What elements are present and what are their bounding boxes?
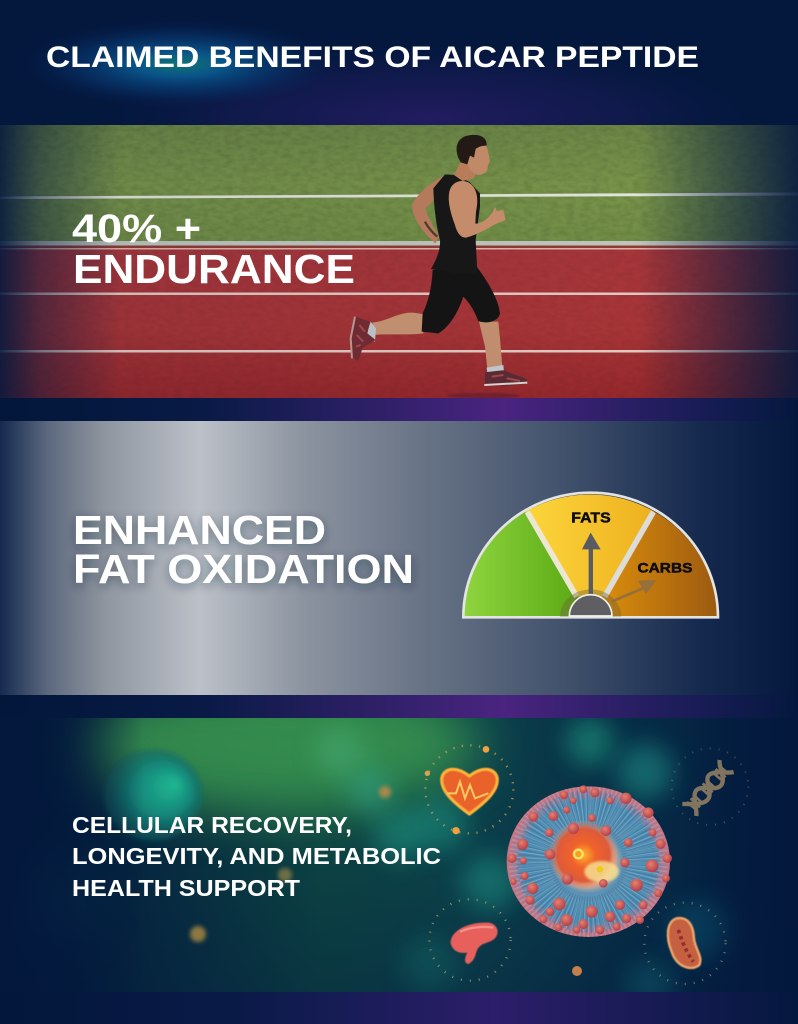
back leg bbox=[373, 313, 425, 335]
cell: fibres bbox=[513, 787, 663, 937]
divider band bbox=[0, 695, 798, 718]
text: cellular recovery bbox=[72, 812, 441, 901]
grass field bbox=[0, 125, 798, 243]
panel: fat oxidation bbox=[0, 421, 798, 695]
icon: gut organ bbox=[429, 899, 511, 981]
panel edge fade bbox=[0, 718, 798, 992]
panel: header bbox=[0, 0, 798, 196]
icon: mitochondrion bbox=[644, 903, 726, 984]
text: cellular recovery: CELLULAR RECOVERY, bbox=[72, 812, 352, 838]
header glow bbox=[20, 20, 340, 108]
arrow: fats bbox=[582, 533, 601, 597]
divider band bbox=[0, 398, 798, 421]
front arm bbox=[449, 181, 506, 238]
running track bbox=[0, 243, 798, 398]
heading: enhanced fat oxidation: ENHANCED bbox=[73, 507, 326, 553]
text: cellular recovery: LONGEVITY, AND METABOLIC bbox=[72, 843, 441, 869]
gauge: yellow zone bbox=[525, 495, 655, 616]
green top glow bbox=[80, 675, 480, 815]
heading: enhanced fat oxidation: FAT OXIDATION bbox=[73, 546, 414, 592]
cell: spikes bbox=[507, 785, 672, 934]
label: fats: FATS bbox=[571, 510, 611, 526]
gauge: green zone bbox=[463, 512, 591, 617]
gauge hub bbox=[569, 595, 612, 616]
background bokeh bbox=[10, 718, 730, 1009]
label: carbs: CARBS bbox=[637, 559, 692, 575]
heading: enhanced fat oxidation bbox=[73, 507, 414, 592]
cell: orange core bbox=[548, 820, 618, 890]
text: endurance: ENDURANCE bbox=[73, 246, 355, 292]
text: cellular recovery: HEALTH SUPPORT bbox=[72, 875, 301, 901]
icon: central cell bbox=[507, 785, 672, 937]
arrow: carbs bbox=[612, 580, 657, 602]
panel: endurance photo bbox=[0, 125, 798, 398]
back arm bbox=[412, 175, 445, 243]
shorts bbox=[422, 267, 500, 333]
icon: dna bbox=[672, 748, 748, 825]
front leg bbox=[479, 322, 502, 369]
gauge: orange zone bbox=[591, 512, 718, 617]
neck bbox=[454, 160, 477, 181]
photo edge fade bbox=[0, 125, 798, 398]
title: CLAIMED BENEFITS OF AICAR PEPTIDE bbox=[46, 41, 699, 74]
icon: runner bbox=[350, 135, 527, 398]
gauge: separators and rim bbox=[527, 512, 577, 597]
face bbox=[465, 145, 490, 175]
icon: heart bbox=[425, 745, 513, 834]
torso singlet bbox=[431, 174, 480, 274]
orange dust spots bbox=[190, 786, 582, 976]
bottom band bbox=[0, 992, 798, 1024]
hair bbox=[457, 135, 487, 164]
illustration scene bbox=[425, 745, 748, 984]
gauge bbox=[463, 493, 718, 617]
text: 40% +: 40% + bbox=[72, 207, 201, 251]
panel: cellular recovery bbox=[66, 718, 750, 992]
